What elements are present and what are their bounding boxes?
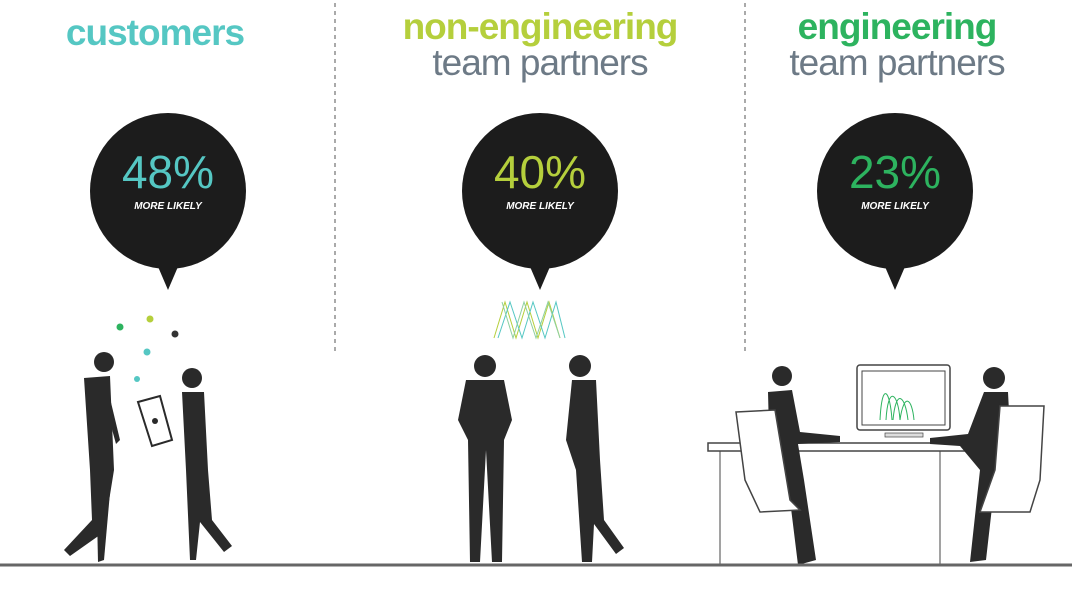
bubble: 23% [817,113,973,290]
bubble: 48% [90,113,246,290]
bubble: 48%: 48% [122,146,214,198]
icon: zigzag lines [494,302,565,338]
heading: non-engineering team partners: non-engineering [403,6,677,47]
heading: engineering team partners [789,6,1005,83]
heading: non-engineering team partners: team partners [432,42,648,83]
bubble: 40%: 40% [494,146,586,198]
people: non-engineering [458,355,624,562]
bubble: 23%: 23% [849,146,941,198]
bubble: 40% [462,113,618,290]
heading: non-engineering team partners [403,6,677,83]
bubble: 23%: MORE LIKELY [861,201,930,212]
bubble: 48%: MORE LIKELY [134,201,203,212]
heading: engineering team partners: team partners [789,42,1005,83]
people: engineering desk [708,365,1044,565]
heading: customers: customers [66,12,244,53]
people: customers [64,352,232,562]
bubble: 40%: MORE LIKELY [506,201,575,212]
icon: data dots [116,316,178,382]
heading: engineering team partners: engineering [798,6,996,47]
